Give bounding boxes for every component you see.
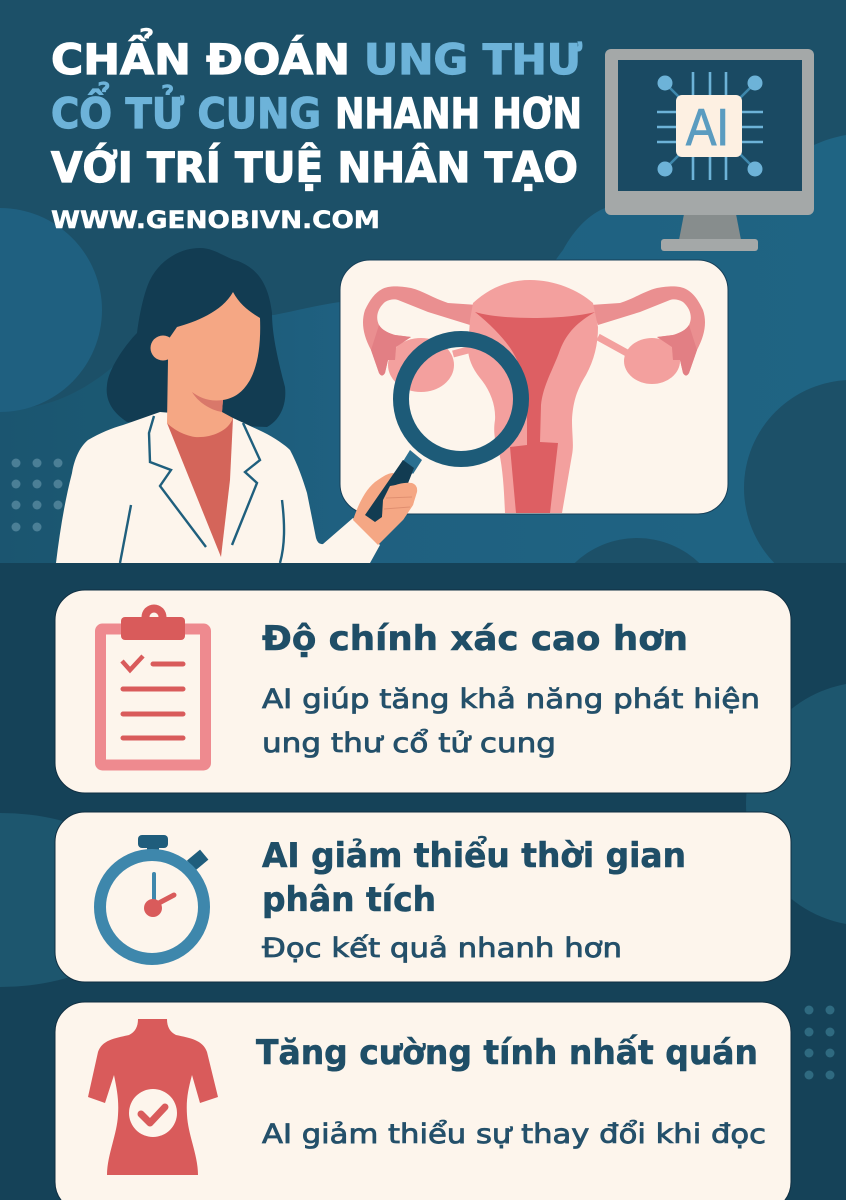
body text: ung thư cổ tử cung [262, 728, 556, 759]
decorative dots right [804, 1006, 834, 1080]
icon: clipboard [100, 604, 206, 765]
title: NHANH HƠN [335, 89, 582, 138]
body text: Đọc kết quả nhanh hơn [262, 933, 622, 964]
heading: phân tích [262, 880, 436, 920]
hand [353, 473, 417, 545]
title: CHẨN ĐOÁN [51, 27, 350, 84]
doctor illustration [56, 248, 417, 563]
panel: reduced analysis time [55, 812, 791, 982]
neck shadow [192, 392, 223, 412]
lapels and pockets [120, 416, 284, 563]
title: UNG THƯ [364, 35, 582, 84]
shirt [167, 418, 233, 557]
icon: torso with check [88, 1019, 218, 1175]
body text: AI giảm thiểu sự thay đổi khi đọc [262, 1119, 766, 1150]
body text [262, 684, 760, 759]
body text: AI giúp tăng khả năng phát hiện [262, 684, 760, 715]
title: CỔ TỬ CUNG [51, 81, 321, 138]
uterine cavity [475, 312, 595, 513]
icon: computer monitor with AI chip [605, 49, 814, 251]
coat [56, 412, 380, 563]
title: VỚI TRÍ TUỆ NHÂN TẠO [51, 142, 578, 192]
ovaries and ligaments [388, 337, 680, 392]
panel: uterus illustration [340, 260, 728, 522]
uterus body [468, 280, 598, 513]
handle over hand [365, 460, 414, 522]
panel: higher accuracy [55, 590, 791, 793]
decorative dots left [12, 458, 62, 532]
heading [262, 835, 686, 920]
heading: Độ chính xác cao hơn [262, 619, 688, 659]
icon: stopwatch [100, 835, 208, 959]
fingers [382, 483, 417, 522]
fallopian tube right [590, 286, 705, 376]
panel: increased consistency [55, 1002, 791, 1200]
face and neck [167, 292, 260, 437]
hair [107, 248, 285, 427]
website url: WWW.GENOBIVN.COM [51, 206, 380, 234]
heading: AI giảm thiểu thời gian [262, 835, 686, 876]
title [51, 27, 582, 192]
magnifying glass [366, 339, 521, 522]
icon: computer monitor with AI chip: AI [686, 99, 729, 157]
heading: Tăng cường tính nhất quán [256, 1033, 758, 1073]
fallopian tube left [363, 286, 478, 376]
ear [150, 336, 176, 360]
